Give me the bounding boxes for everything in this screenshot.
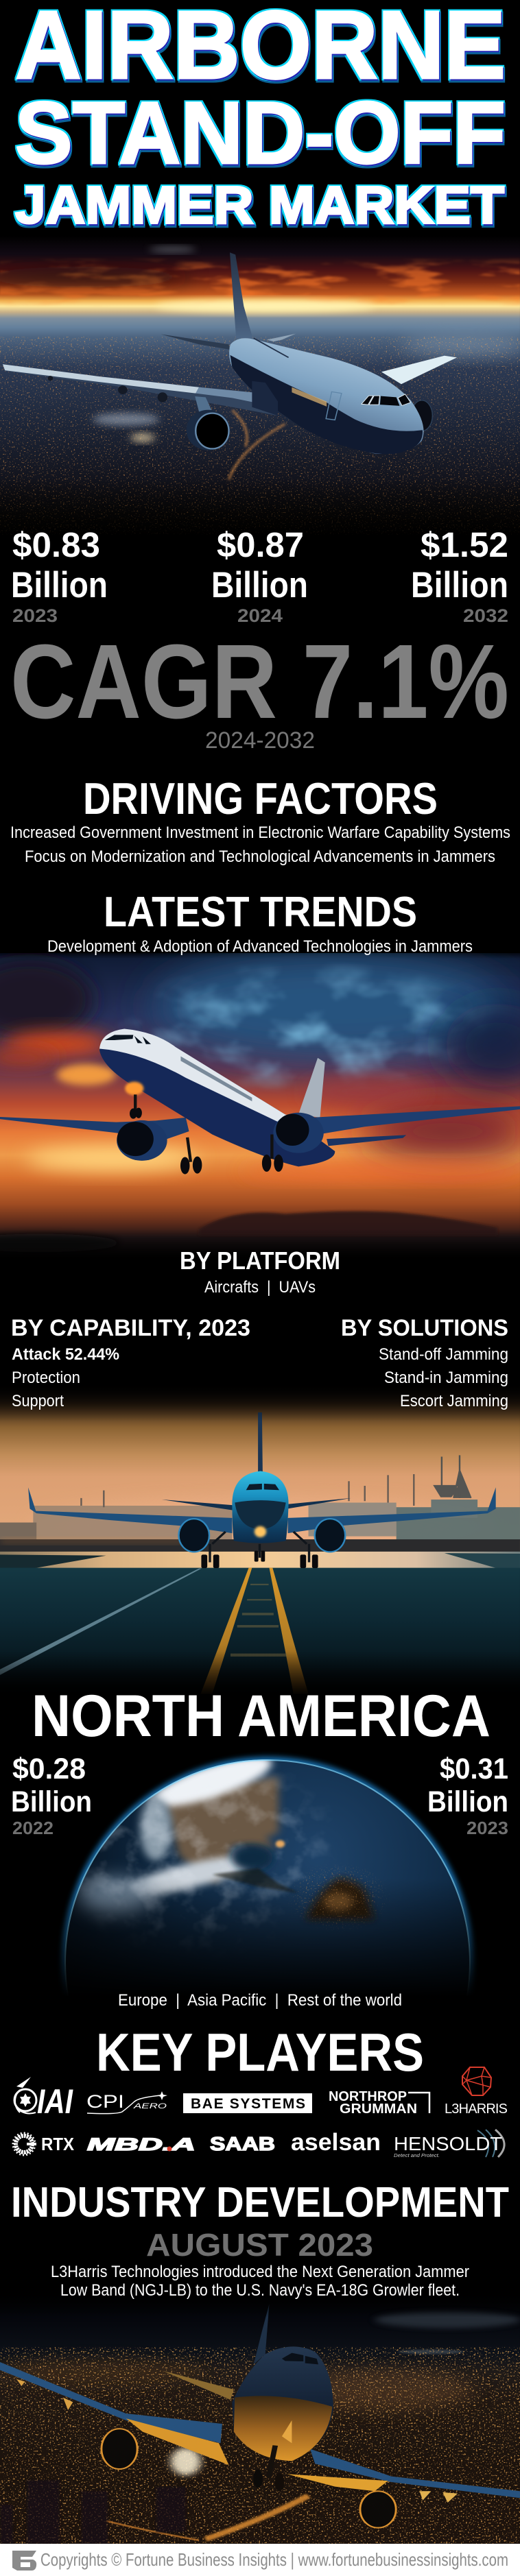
airport buildings bbox=[0, 1455, 520, 1543]
image: airliner landing at sunset bbox=[0, 951, 520, 1275]
regional value 2022: Billion bbox=[11, 1785, 92, 1818]
segment: by solutions: Stand-in Jamming bbox=[384, 1369, 508, 1387]
segment: by capability bbox=[11, 1315, 250, 1410]
logo: L3Harris: L3HARRIS bbox=[445, 2102, 508, 2117]
logo: Hensoldt: HENSOLDT bbox=[394, 2133, 502, 2154]
image: earth globe bbox=[59, 1753, 476, 1991]
driving factors text bbox=[10, 823, 510, 866]
stat 2023: $0.83 bbox=[12, 525, 100, 564]
logo: Northrop Grumman bbox=[329, 2089, 429, 2117]
segment: by platform: BY PLATFORM bbox=[180, 1247, 340, 1275]
logo: Northrop Grumman: NORTHROP bbox=[329, 2089, 407, 2104]
regional value 2023: Billion bbox=[427, 1785, 508, 1818]
heading: north america: NORTH AMERICA bbox=[32, 1683, 491, 1749]
regional value 2022: $0.28 bbox=[12, 1753, 86, 1785]
segment: by solutions: BY SOLUTIONS bbox=[341, 1315, 508, 1341]
logo: Hensoldt bbox=[394, 2130, 504, 2158]
plane 1 fuselage bbox=[229, 338, 424, 454]
plane 3 fuselage bbox=[232, 1471, 289, 1543]
stat 2024: Billion bbox=[211, 565, 308, 605]
plane 2 wings and tail bbox=[0, 1058, 520, 1146]
trends text: Development & Adoption of Advanced Technologies in Jammers bbox=[47, 937, 473, 956]
regional value 2023: 2023 bbox=[466, 1818, 508, 1838]
footer bbox=[0, 2544, 520, 2576]
icon: Fortune Business Insights logo bbox=[12, 2551, 36, 2571]
stat 2024 bbox=[211, 525, 308, 626]
plane 1 tail and far wing bbox=[161, 252, 457, 431]
plane 1 engine bbox=[187, 381, 278, 450]
logo: CPI Aero: AERO bbox=[132, 2102, 167, 2110]
plane 4 engines and gear bbox=[102, 2429, 396, 2528]
regional value 2023: $0.31 bbox=[440, 1753, 508, 1785]
plane 3 engines and gear bbox=[179, 1519, 345, 1568]
logo: IAI bbox=[14, 2077, 73, 2121]
stat 2032: 2032 bbox=[463, 605, 508, 626]
regional value 2022 bbox=[11, 1753, 92, 1838]
stat 2024: $0.87 bbox=[217, 525, 304, 564]
segment: by capability: Protection bbox=[12, 1369, 80, 1387]
stat 2032: Billion bbox=[411, 565, 508, 605]
CAGR period: 2024-2032 bbox=[205, 727, 315, 754]
plane 2 landing gear bbox=[125, 1082, 283, 1174]
logo: BAE Systems: BAE SYSTEMS bbox=[191, 2096, 305, 2112]
segment: by solutions: Stand-off Jamming bbox=[379, 1345, 508, 1364]
heading: driving factors: DRIVING FACTORS bbox=[83, 773, 438, 823]
plane 3 wings bbox=[28, 1412, 496, 1533]
logo: MBDA: MBD.A bbox=[87, 2135, 196, 2154]
development date: AUGUST 2023 bbox=[146, 2227, 373, 2263]
north america landmass bbox=[163, 1777, 279, 1883]
image: airliner over city at dusk bbox=[0, 232, 520, 542]
plane 2 fuselage bbox=[99, 1028, 335, 1166]
stat 2023 bbox=[11, 525, 108, 626]
segment: by solutions: Escort Jamming bbox=[400, 1392, 508, 1410]
segment: by solutions bbox=[341, 1315, 508, 1410]
plane 1 near wing bbox=[3, 364, 278, 416]
cloud cover bbox=[50, 1746, 348, 1960]
market size stats bbox=[11, 525, 508, 626]
segment: by capability: Attack 52.44% bbox=[12, 1345, 119, 1364]
segment: by platform: Aircrafts | UAVs bbox=[204, 1278, 316, 1297]
title: JAMMER MARKET bbox=[15, 176, 504, 234]
logo: IAI: IAI bbox=[37, 2082, 73, 2121]
segment: by capability: BY CAPABILITY, 2023 bbox=[11, 1315, 250, 1341]
stat 2032: $1.52 bbox=[421, 525, 508, 564]
image: airliner over night city bbox=[0, 2290, 520, 2544]
logo: L3Harris bbox=[445, 2067, 508, 2117]
stat 2032 bbox=[411, 525, 508, 626]
stat 2023: 2023 bbox=[12, 605, 58, 626]
stat 2023: Billion bbox=[11, 565, 108, 605]
logo: Hensoldt: Detect and Protect. bbox=[394, 2152, 440, 2158]
segment: by platform bbox=[180, 1247, 340, 1297]
logo: CPI Aero: CPI bbox=[86, 2091, 124, 2112]
logo: Aselsan: aselsan bbox=[291, 2129, 381, 2156]
title bbox=[15, 0, 506, 234]
logo: Saab: SAAB bbox=[210, 2133, 275, 2154]
logos: key players bbox=[13, 2067, 508, 2158]
development text: L3Harris Technologies introduced the Next Generation Jammer bbox=[51, 2263, 469, 2281]
plane 2 engines bbox=[117, 1113, 324, 1161]
image: airliner on runway bbox=[0, 1382, 520, 1697]
title: STAND-OFF bbox=[15, 84, 506, 182]
logo: Northrop Grumman: GRUMMAN bbox=[340, 2102, 417, 2117]
plane 4 wings and tail bbox=[0, 2304, 520, 2503]
heading: latest trends: LATEST TRENDS bbox=[104, 889, 417, 936]
regional value 2023 bbox=[427, 1753, 508, 1838]
logo: RTX: RTX bbox=[41, 2134, 75, 2154]
segment: by capability: Support bbox=[12, 1392, 64, 1410]
other regions: Europe | Asia Pacific | Rest of the world bbox=[118, 1991, 402, 2010]
stat 2024: 2024 bbox=[237, 605, 283, 626]
plane 4 fuselage bbox=[232, 2346, 333, 2461]
heading: key players: KEY PLAYERS bbox=[96, 2022, 424, 2082]
regional value 2022: 2022 bbox=[12, 1818, 54, 1838]
development text bbox=[51, 2263, 469, 2300]
logo: MBDA bbox=[87, 2135, 196, 2154]
logo: RTX bbox=[13, 2133, 75, 2155]
development text: Low Band (NGJ-LB) to the U.S. Navy's EA-18G Growler fleet. bbox=[60, 2281, 460, 2300]
logo: CPI Aero bbox=[86, 2091, 167, 2114]
